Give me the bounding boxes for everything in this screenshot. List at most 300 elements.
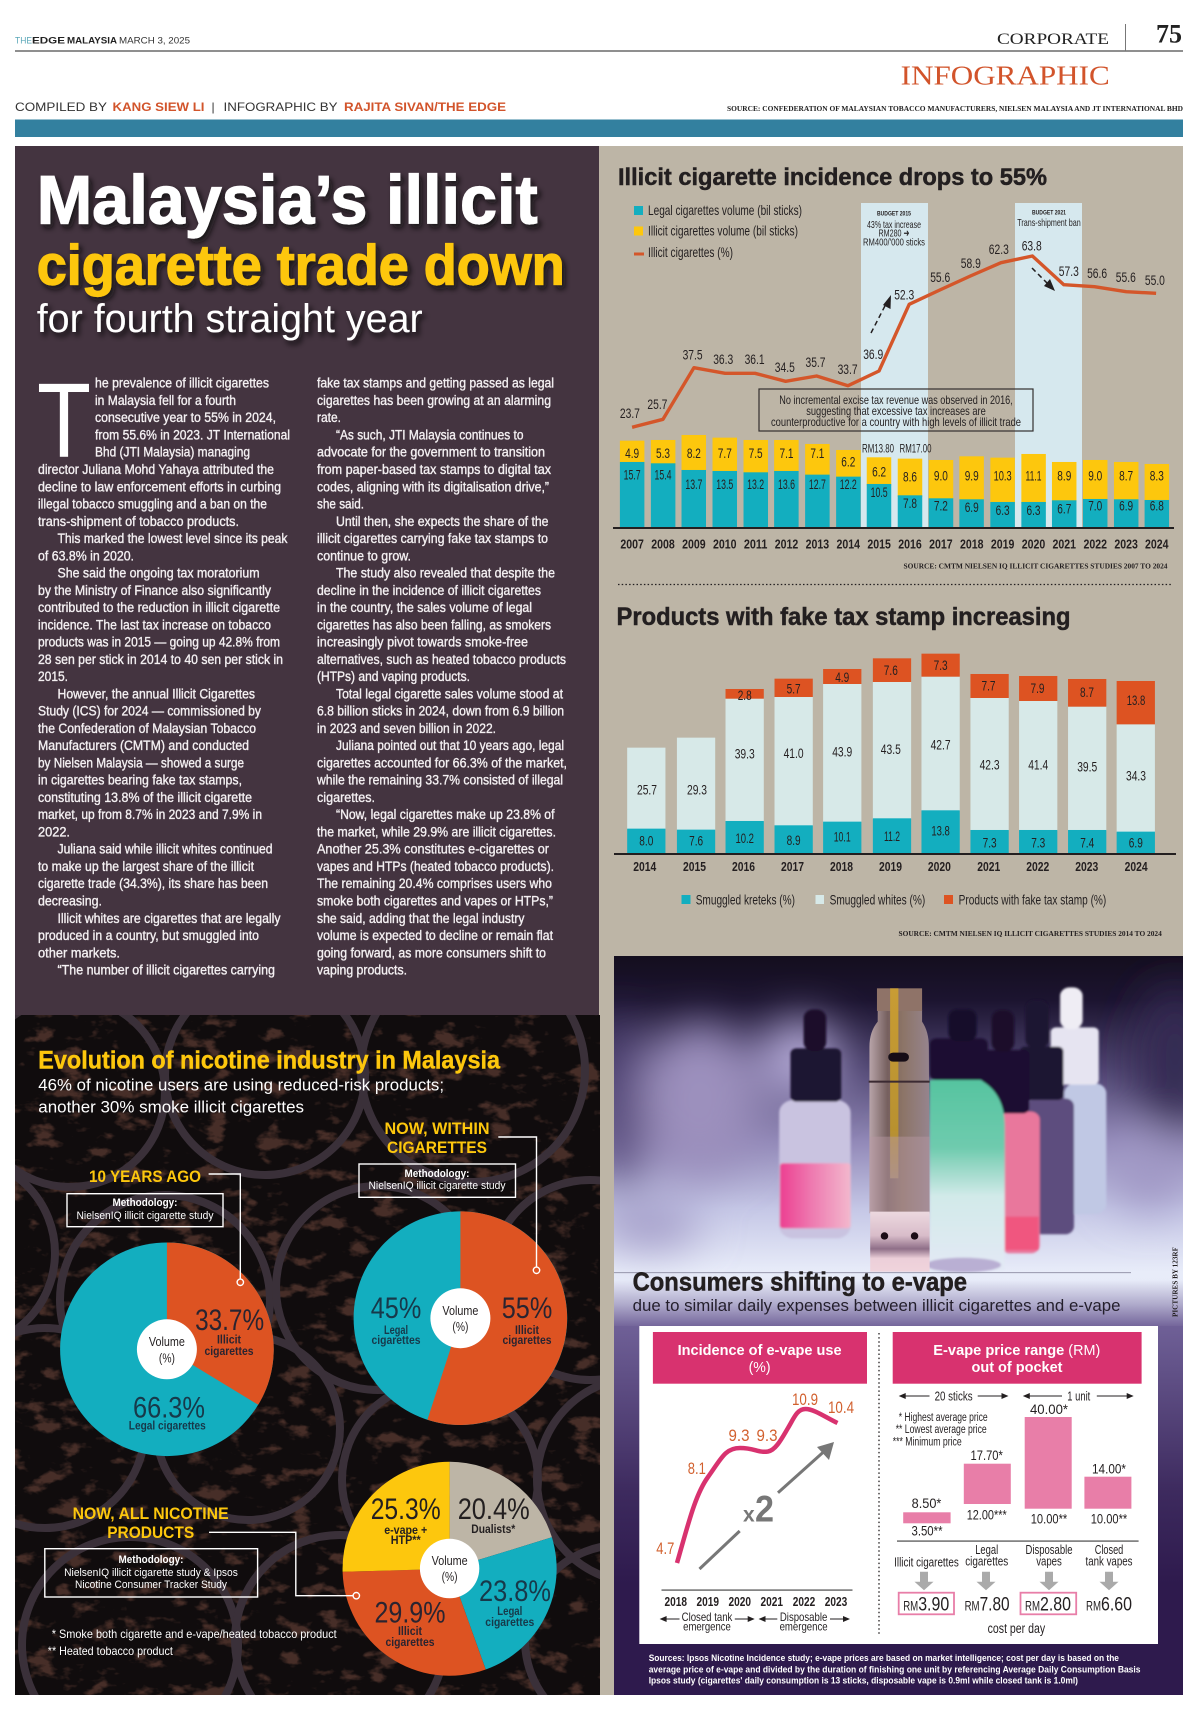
emergence annotations: Closed tank: [682, 1610, 733, 1624]
main title: cigarette trade down: [37, 234, 565, 298]
footnotes: [48, 1627, 337, 1658]
line chart value labels: 35.7: [806, 355, 826, 370]
article column 1: “The number of illicit cigarettes carrying: [58, 962, 275, 978]
cost per day values: [899, 1593, 1132, 1616]
chart 2 kretek labels: 7.3: [983, 836, 997, 850]
price notes: *** Minimum price: [893, 1437, 962, 1449]
chart 2 kretek labels: 11.2: [884, 829, 900, 844]
chart 1 legal volume labels: 15.4: [654, 468, 672, 482]
chart 1 year axis labels: 2014: [837, 536, 861, 552]
line chart value labels: 36.3: [713, 352, 733, 367]
price notes: [893, 1412, 988, 1449]
article column 1: Manufacturers (CMTM) and conducted: [38, 738, 249, 753]
masthead: publication and date: MALAYSIA: [67, 36, 117, 46]
line chart value labels: 58.9: [961, 256, 981, 271]
dashed arrow down: [1032, 268, 1055, 291]
chart 1 year axis labels: [620, 536, 1169, 552]
product category labels: tank vapes: [1086, 1554, 1132, 1568]
chart 1 illicit volume labels: 8.6: [903, 470, 917, 484]
sources note: Sources: Ipsos Nicotine Incidence study; e-vape prices are based on market intelligence; cost per day is based on the: [649, 1653, 1119, 1663]
band note: budget 2021: Trans-shipment ban: [1017, 217, 1081, 229]
pie: all nicotine products: Illicit: [398, 1626, 422, 1638]
dashed arrow up: [871, 295, 891, 333]
chart 2 year axis labels: 2018: [830, 859, 853, 874]
pie: all nicotine products: e-vape +: [384, 1525, 427, 1537]
panel: tan charts background: [599, 146, 1183, 1695]
pie: 10 years ago: Illicit: [217, 1334, 241, 1346]
pie: all nicotine products: 29.9%: [374, 1596, 446, 1630]
article column 2: illicit cigarettes carrying fake tax stamps to: [317, 531, 548, 546]
chart 1 stacked bars: legal and illicit volume: [620, 435, 1169, 527]
chart 1 legal volume labels: 12.2: [840, 477, 857, 492]
chart 2 smuggled whites labels: 29.3: [687, 782, 707, 798]
evolution subheading: [38, 1076, 444, 1116]
chart 1 illicit volume labels: 8.9: [1057, 468, 1071, 484]
product category labels: Illicit cigarettes: [894, 1556, 959, 1570]
article column 2: 6.8 billion sticks in 2024, down from 6.9 billion: [317, 704, 564, 719]
article column 2: cigarettes accounted for 66.3% of the market,: [317, 755, 567, 770]
pie: 10 years ago: Volume: [149, 1334, 185, 1349]
price range labels: 40.00*: [1030, 1401, 1069, 1417]
article column 2: Juliana pointed out that 10 years ago, legal: [336, 738, 564, 753]
article column 2: Total legal cigarette sales volume stood at: [336, 686, 563, 701]
sources note: Ipsos study (cigarettes' daily consumption is 13 sticks, disposable vape is 0.9ml while closed tank is 1.0ml): [649, 1675, 1078, 1685]
credits line: COMPILED BY: [15, 100, 107, 114]
article column 2: advocate for the government to transition: [317, 445, 545, 460]
RM price labels: RM13.80: [862, 441, 894, 455]
chart 1 legal volume labels: 6.7: [1057, 502, 1071, 516]
page number: 75: [1156, 20, 1182, 48]
chart 2 heading: Products with fake tax stamp increasing: [616, 603, 1070, 631]
pie: now within cigarettes: 55%: [502, 1292, 552, 1325]
label: now within cigarettes: [384, 1119, 490, 1157]
chart 1 legend: Legal cigarettes volume (bil sticks): [648, 202, 802, 218]
chart 1 legal volume labels: 6.8: [1150, 498, 1164, 514]
chart 2 kretek labels: 7.4: [1080, 836, 1095, 850]
pie: now within cigarettes: [354, 1211, 567, 1425]
article column 2: cigarettes has also been falling, as smokers: [317, 617, 551, 632]
chart 2 year axis labels: 2017: [781, 859, 804, 874]
methodology box: 10 years ago: [67, 1194, 223, 1227]
chart 2 kretek labels: 6.9: [1129, 836, 1143, 850]
product category labels: [894, 1543, 1132, 1570]
title third line: for fourth straight year: [37, 297, 423, 341]
article column 2: alternatives, such as heated tobacco products: [317, 652, 566, 667]
chart 1 year axis labels: 2017: [929, 536, 953, 552]
price range labels: 10.00**: [1091, 1510, 1128, 1526]
article column 1: Juliana said while illicit whites continued: [58, 842, 272, 857]
pie: all nicotine products: 23.8%: [479, 1575, 551, 1608]
line chart value labels: 34.5: [775, 360, 795, 375]
chart 2 fake stamp labels: 13.8: [1127, 693, 1145, 708]
chart 1 year axis labels: 2019: [991, 536, 1014, 552]
article column 1: Bhd (JTI Malaysia) managing: [95, 445, 250, 460]
footnotes: * Smoke both cigarette and e-vape/heated tobacco product: [52, 1627, 337, 1641]
chart 1 legal volume labels: 7.8: [903, 496, 917, 511]
chart 2 fake stamp labels: 8.7: [1080, 685, 1094, 700]
chart 2 year axis labels: 2014: [633, 859, 657, 874]
evolution subheading: 46% of nicotine users are using reduced-risk products;: [38, 1076, 444, 1094]
evolution subheading: another 30% smoke illicit cigarettes: [38, 1098, 304, 1116]
chart 1 illicit volume labels: 7.1: [780, 446, 794, 461]
source line: SOURCE: CONFEDERATION OF MALAYSIAN TOBACCO MANUFACTURERS, NIELSEN MALAYSIA AND JT INTERNATIONAL BHD: [727, 104, 1184, 113]
article column 1: decline to law enforcement efforts in curbing: [38, 479, 281, 494]
incidence year labels: 2022: [793, 1594, 815, 1609]
price range labels: 10.00**: [1031, 1511, 1068, 1527]
pie: all nicotine products: Legal: [497, 1606, 522, 1618]
chart 1 legal volume labels: 7.2: [934, 498, 948, 514]
header: e-vape price range: E-vape price range(RM): [933, 1342, 1100, 1359]
line chart value labels: 23.7: [620, 406, 640, 421]
article column 1: cigarette trade (34.3%), its share has been: [38, 876, 268, 891]
chart 2 kretek labels: 7.3: [1031, 836, 1045, 850]
article column 2: “Now, legal cigarettes make up 23.8% of: [336, 807, 555, 822]
chart 2 smuggled whites labels: 43.9: [832, 744, 852, 760]
chart 2 fake stamp labels: 7.6: [884, 663, 898, 678]
chart 2 year axis labels: [633, 859, 1148, 874]
article column 1: illegal tobacco smuggling and a ban on the: [38, 496, 267, 512]
pie: now within cigarettes: cigarettes: [502, 1335, 552, 1347]
price range labels: 14.00*: [1092, 1460, 1126, 1476]
article column 2: in 2023 and seven billion in 2022.: [317, 721, 496, 736]
line chart: illicit cigarettes percent: [632, 256, 1156, 427]
panel: white e-vape card: [639, 1326, 1158, 1644]
pie: 10 years ago: Legal cigarettes: [129, 1420, 206, 1432]
drop cap: T: [37, 362, 91, 480]
price range labels: [912, 1401, 1128, 1539]
section label: infographic: INFOGRAPHIC: [901, 60, 1110, 90]
chart 1 year axis labels: 2022: [1083, 536, 1107, 552]
unit ranges: 20 sticks and 1 unit: [899, 1388, 1134, 1404]
chart 1 year axis labels: 2024: [1145, 536, 1169, 552]
price range labels: 3.50**: [912, 1523, 943, 1539]
chart 2 fake stamp labels: 7.7: [982, 678, 996, 694]
e-vape curve labels: [656, 1390, 854, 1558]
article column 1: other markets.: [38, 945, 120, 960]
main title: [37, 162, 565, 298]
header: incidence of e-vape use: Incidence of e-vape use: [678, 1342, 842, 1359]
article column 2: Another 25.3% constitutes e-cigarettes or: [317, 842, 549, 857]
chart 1 illicit volume labels: 10.3: [994, 468, 1012, 484]
pie: 10 years ago: 33.7%: [195, 1304, 264, 1337]
incidence year labels: 2019: [696, 1594, 719, 1609]
chart 1 legal volume labels: 6.3: [996, 503, 1010, 518]
line chart value labels: 33.7: [838, 362, 858, 377]
chart 1 legal volume labels: 6.9: [965, 500, 979, 515]
purple bottle: [1028, 1098, 1074, 1234]
chart 1 source: SOURCE: CMTM NIELSEN IQ ILLICIT CIGARETTES STUDIES 2007 TO 2024: [904, 562, 1168, 570]
green bottle: [930, 1080, 1005, 1273]
consumers subheading: due to similar daily expenses between illicit cigarettes and e-vape: [633, 1297, 1120, 1315]
line chart value labels: 36.9: [863, 347, 883, 362]
chart 2 smuggled whites labels: 41.0: [784, 746, 804, 761]
chart 2 smuggled whites labels: 39.5: [1077, 760, 1097, 774]
product category labels: cigarettes: [965, 1554, 1008, 1568]
chart 1 illicit volume labels: 7.1: [810, 446, 824, 461]
chart 2 year axis labels: 2022: [1026, 859, 1049, 874]
pie: all nicotine products: Dualists*: [471, 1524, 516, 1536]
teal band: [15, 120, 1183, 137]
emergence annotations: [660, 1610, 850, 1634]
article column 1: 2015.: [38, 669, 68, 684]
article column 2: continue to grow.: [317, 548, 411, 563]
pie: all nicotine products: cigarettes: [485, 1617, 534, 1629]
article column 1: the Confederation of Malaysian Tobacco: [38, 721, 256, 736]
line chart value labels: 36.1: [745, 352, 765, 367]
article column 2: “As such, JTI Malaysia continues to: [336, 428, 524, 442]
article column 2: volume is expected to decline or remain flat: [317, 928, 553, 943]
connector: all nicotine products: [209, 1532, 359, 1599]
unit ranges: 20 sticks and 1 unit: 1 unit: [1067, 1388, 1091, 1404]
article column 2: she said.: [317, 496, 364, 512]
methodology box: now within cigarettes: NielsenIQ illicit cigarette study: [368, 1180, 506, 1192]
chart 1 year axis labels: 2018: [960, 536, 983, 552]
cost per day caption: cost per day: [988, 1621, 1045, 1636]
article column 1: by the Ministry of Finance also significantly: [38, 583, 271, 598]
article column 2: vapes and HTPs (heated tobacco products).: [317, 859, 554, 874]
pie: all nicotine products: 25.3%: [371, 1493, 441, 1526]
chart 1 illicit volume labels: 4.9: [625, 446, 639, 461]
price range labels: 12.00***: [967, 1507, 1007, 1523]
chart 2 smuggled whites labels: 25.7: [637, 782, 657, 798]
chart 2 kretek labels: 8.9: [787, 833, 801, 848]
chart 1 legend: [634, 202, 802, 260]
panel: consumers shifting purple background: [614, 1326, 1183, 1695]
product category labels: Legal: [975, 1543, 998, 1557]
gray trend arrow with x2: 2: [755, 1488, 774, 1530]
chart 1 legal volume labels: 15.7: [624, 468, 641, 482]
article column 1: by Nielsen Malaysia — showed a surge: [38, 755, 244, 770]
line chart value labels: 63.8: [1022, 238, 1042, 254]
line chart value labels: [620, 238, 1165, 421]
chart 2 kretek labels: [639, 824, 1143, 850]
line chart value labels: 55.6: [1116, 270, 1136, 285]
article column 1: incidence. The last tax increase on tobacco: [38, 617, 271, 632]
article column 2: fake tax stamps and getting passed as legal: [317, 376, 554, 391]
sources note: average price of e-vape and divided by the duration of finishing one unit by referencing Average Daily Consumption Basis: [649, 1664, 1140, 1674]
pie: all nicotine products: cigarettes: [386, 1637, 434, 1649]
footnotes: ** Heated tobacco product: [48, 1644, 173, 1658]
left bottle: [779, 1100, 851, 1238]
line chart value labels: 62.3: [989, 242, 1009, 257]
cost per day values: RM3.90: [903, 1594, 949, 1616]
incidence year labels: [665, 1594, 847, 1609]
article column 1: in Malaysia fell for a fourth: [95, 393, 236, 408]
article column 2: rate.: [317, 410, 341, 425]
price notes: ** Lowest average price: [896, 1424, 987, 1436]
line chart value labels: 55.6: [930, 270, 950, 285]
line chart value labels: 52.3: [894, 288, 914, 302]
e-vape incidence curve: [677, 1409, 838, 1563]
article column 2: going forward, as more consumers shift to: [317, 945, 546, 960]
chart 1 illicit volume labels: 8.7: [1119, 468, 1133, 484]
band note: budget 2015: BUDGET 2015: [877, 210, 911, 218]
pie: now within cigarettes: 45%: [371, 1292, 421, 1325]
cost per day values: RM6.60: [1086, 1594, 1132, 1616]
line chart value labels: 57.3: [1059, 264, 1079, 279]
line chart value labels: 56.6: [1087, 266, 1107, 281]
article column 1: to make up the largest share of the illicit: [38, 859, 254, 874]
chart 2 legend: Smuggled kreteks (%): [696, 892, 795, 908]
header: incidence of e-vape use: [653, 1332, 867, 1384]
pie: 10 years ago: (%): [159, 1350, 175, 1366]
chart 2 kretek labels: 10.2: [735, 831, 754, 846]
pie: 10 years ago: [60, 1242, 274, 1456]
line chart value labels: 25.7: [647, 397, 667, 412]
e-vape curve labels: 10.9: [792, 1390, 818, 1409]
chart 1 illicit volume labels: 9.0: [1088, 468, 1102, 484]
e-vape curve labels: 4.7: [656, 1539, 674, 1558]
band note: budget 2021: BUDGET 2021: [1032, 210, 1066, 216]
credits line: |: [212, 100, 215, 114]
RM price labels: RM17.00: [900, 441, 932, 455]
article column 2: cigarettes has been growing at an alarming: [317, 393, 551, 408]
gray down arrows: [914, 1572, 1118, 1590]
pie: 10 years ago: cigarettes: [204, 1346, 254, 1358]
price range bars: [903, 1417, 1131, 1523]
article column 2: in the country, the sales volume of legal: [317, 600, 532, 615]
chart 2 fake stamp labels: 5.7: [787, 682, 801, 696]
methodology box: all nicotine products: [45, 1549, 258, 1597]
price range labels: 17.70*: [971, 1447, 1003, 1463]
emergence annotations: emergence: [780, 1620, 828, 1634]
article column 2: while the remaining 33.7% consisted of illegal: [316, 773, 563, 788]
pie: all nicotine products: [343, 1462, 557, 1676]
article column 2: The remaining 20.4% comprises users who: [317, 876, 552, 891]
main title: Malaysia’s illicit: [37, 162, 538, 238]
chart 1 legal volume labels: 6.3: [1026, 503, 1040, 518]
chart 1 axis: [613, 527, 1174, 529]
chart 1 year axis labels: 2007: [620, 536, 644, 552]
chart 2 kretek labels: 8.0: [639, 834, 653, 848]
chart 2 stacked bars: [627, 654, 1155, 853]
chart 1 illicit volume labels: 7.5: [749, 446, 763, 461]
note box: [759, 389, 1033, 431]
vape pen: [869, 1010, 930, 1213]
pie: all nicotine products: (%): [442, 1569, 458, 1584]
article column 2: vaping products.: [317, 962, 407, 978]
masthead: publication and date: MARCH 3, 2025: [119, 36, 190, 46]
label: now within cigarettes: NOW, WITHIN: [384, 1119, 490, 1138]
article column 1: Illicit whites are cigarettes that are legally: [58, 911, 281, 926]
article column 2: (HTPs) and vaping products.: [317, 669, 470, 684]
chart 2 fake stamp labels: 2.8: [738, 688, 752, 703]
picture credit: PICTURES BY 123RF: [1172, 1246, 1180, 1317]
article column 2: The study also revealed that despite the: [336, 566, 555, 581]
chart 2 year axis labels: 2020: [928, 859, 951, 874]
methodology box: all nicotine products: Nicotine Consumer Tracker Study: [75, 1579, 227, 1591]
chart 2 axis: [614, 853, 1176, 855]
incidence year labels: 2023: [825, 1594, 847, 1609]
methodology box: 10 years ago: NielsenIQ illicit cigarette study: [76, 1210, 214, 1222]
methodology box: now within cigarettes: [359, 1164, 516, 1197]
pie: all nicotine products: HTP**: [391, 1535, 421, 1547]
label: now all nicotine products: NOW, ALL NICOTINE: [73, 1504, 229, 1523]
photo: e-vape and liquid bottles: [598, 956, 1200, 1328]
chart 1 year axis labels: 2008: [651, 536, 675, 552]
chart 1 illicit volume labels: 6.2: [872, 464, 886, 480]
article column 1: of 63.8% in 2020.: [38, 548, 134, 563]
chart 1 year axis labels: 2016: [898, 536, 922, 552]
e-vape curve labels: 10.4: [828, 1398, 854, 1417]
white bottle: [1064, 1083, 1106, 1214]
masthead: publication and date: EDGE: [32, 36, 65, 46]
chart 1 heading: Illicit cigarette incidence drops to 55%: [618, 164, 1047, 191]
pie: all nicotine products: Volume: [432, 1553, 468, 1568]
chart 1 illicit volume labels: 9.0: [934, 468, 948, 483]
chart 2 year axis labels: 2024: [1125, 859, 1148, 874]
chart 1 year axis labels: 2023: [1114, 536, 1138, 552]
article column 1: She said the ongoing tax moratorium: [58, 566, 260, 581]
pie: all nicotine products: 20.4%: [458, 1493, 530, 1526]
article column 1: [37, 362, 290, 978]
evolution heading: Evolution of nicotine industry in Malaysia: [38, 1046, 501, 1074]
article column 1: in cigarettes bearing fake tax stamps,: [38, 773, 242, 788]
chart 1 legal volume labels: 13.2: [747, 477, 764, 492]
chart 1 year axis labels: 2012: [775, 536, 798, 552]
chart 2 smuggled whites labels: [637, 738, 1146, 798]
credits line: KANG SIEW LI: [112, 100, 204, 114]
connector: 10 years ago: [209, 1174, 244, 1286]
article column 1: 2022.: [38, 824, 70, 840]
price notes: * Highest average price: [899, 1412, 988, 1424]
article column 1: produced in a country, but smuggled into: [38, 928, 259, 943]
chart 2 fake stamp labels: 4.9: [835, 670, 849, 685]
connector: now within cigarettes: [498, 1137, 540, 1274]
chart 1 legal volume labels: 10.5: [871, 485, 888, 500]
article column 1: contributed to the reduction in illicit cigarette: [38, 600, 280, 615]
gray trend arrow with x2: [700, 1442, 834, 1569]
header: e-vape price range: out of pocket: [972, 1359, 1062, 1376]
section name: corporate: CORPORATE: [997, 31, 1109, 48]
chart 1 illicit volume labels: 11.1: [1026, 468, 1042, 484]
article column 1: trans-shipment of tobacco products.: [38, 514, 239, 529]
chart 2 smuggled whites labels: 42.3: [980, 758, 1000, 772]
chart 1 year axis labels: 2015: [867, 536, 891, 552]
chart 1 year axis labels: 2021: [1053, 536, 1076, 552]
article column 1: consecutive year to 55% in 2024,: [95, 410, 276, 425]
chart 2 legend: Smuggled whites (%): [830, 892, 925, 908]
incidence year labels: 2018: [665, 1594, 687, 1609]
chart 2 smuggled whites labels: 42.7: [931, 738, 951, 752]
article column 2: cigarettes.: [317, 790, 375, 805]
note box: counterproductive for a country with high levels of illicit trade: [771, 415, 1021, 429]
credits line: INFOGRAPHIC BY: [224, 100, 338, 114]
article column 1: director Juliana Mohd Yahaya attributed the: [38, 462, 274, 477]
methodology box: 10 years ago: Methodology:: [112, 1197, 178, 1209]
chart 2 year axis labels: 2023: [1075, 859, 1098, 874]
chart 2 kretek labels: 7.6: [689, 834, 703, 848]
chart 2 legend: [682, 892, 1106, 908]
chart 2 year axis labels: 2016: [732, 859, 755, 874]
band note: budget 2015: 43% tax increase: [867, 219, 921, 231]
masthead: publication and date: [15, 36, 190, 46]
header: e-vape price range: [893, 1332, 1142, 1384]
article column 1: market, up from 8.7% in 2023 and 7.9% in: [38, 807, 262, 822]
pie: now within cigarettes: cigarettes: [372, 1335, 420, 1347]
band note: budget 2015: RM400/'000 sticks: [863, 236, 925, 248]
product category labels: Closed: [1095, 1543, 1123, 1557]
chart 1 legend: Illicit cigarettes (%): [648, 244, 733, 260]
pie: now within cigarettes: Illicit: [515, 1325, 539, 1337]
chart 1 illicit volume labels: 7.7: [718, 446, 732, 461]
chart 1 year axis labels: 2010: [713, 536, 737, 552]
unit ranges: 20 sticks and 1 unit: 20 sticks: [935, 1388, 973, 1404]
chart 1 legend: Illicit cigarettes volume (bil sticks): [648, 222, 798, 238]
chart 1 illicit volume labels: 9.9: [965, 468, 979, 483]
chart 1 illicit volume labels: [625, 446, 1164, 484]
methodology box: all nicotine products: Methodology:: [118, 1554, 184, 1566]
